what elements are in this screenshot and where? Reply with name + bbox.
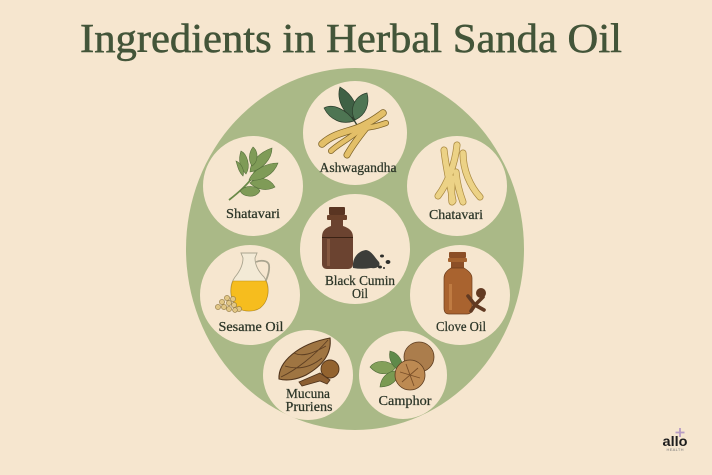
label: Shatavari xyxy=(226,207,280,222)
icon: chatavari roots xyxy=(438,145,480,202)
icon: camphor nuts and leaves xyxy=(370,342,434,390)
label: Sesame Oil xyxy=(218,320,284,335)
panel: Mucuna Pruriens xyxy=(263,330,353,420)
icon: clove oil bottle xyxy=(444,252,486,314)
title: Ingredients in Herbal Sanda Oil xyxy=(80,15,622,61)
logo: allo health xyxy=(662,428,688,452)
logo: allo health: HEALTH xyxy=(666,447,684,452)
label line 2: Pruriens xyxy=(286,400,332,415)
label: Black Cumin xyxy=(325,274,395,289)
icon: mucuna pod and clove xyxy=(279,338,339,386)
panel: Sesame Oil xyxy=(200,245,300,345)
panel: Clove Oil xyxy=(410,245,510,345)
icon: ashwagandha root and leaves xyxy=(322,87,386,155)
label: Mucuna xyxy=(286,387,331,402)
label: Chatavari xyxy=(429,208,483,223)
icon: dark bottle with black cumin seeds xyxy=(322,207,390,269)
icon: sesame oil jug xyxy=(215,253,269,312)
icon: shatavari sprig xyxy=(229,147,278,200)
label: Ashwagandha xyxy=(320,161,397,176)
panel: Camphor xyxy=(359,331,447,419)
label: Camphor xyxy=(378,394,432,409)
label line 2: Oil xyxy=(352,287,368,302)
label: Clove Oil xyxy=(436,320,486,335)
panel: Shatavari xyxy=(203,136,303,236)
panel: Black Cumin Oil xyxy=(300,194,410,304)
green oval background xyxy=(186,68,524,430)
panel: Chatavari xyxy=(407,136,507,236)
panel: Ashwagandha xyxy=(303,81,407,185)
logo: allo health: allo xyxy=(662,433,688,449)
